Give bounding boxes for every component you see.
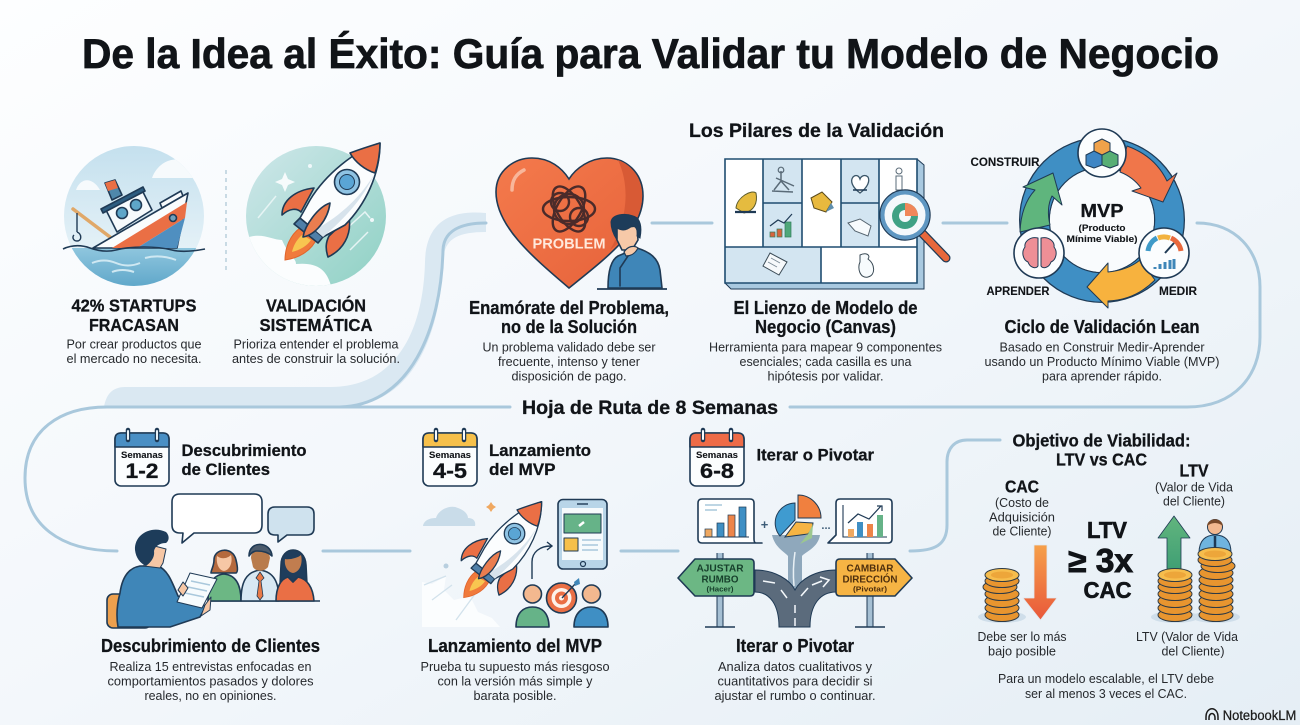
chart: lean validation cycle: MVP <box>1080 201 1124 221</box>
canvas icon: revenue bag <box>859 254 874 277</box>
heading: lanzamiento <box>489 441 591 479</box>
canvas icon: value cube <box>811 192 832 212</box>
chart bubble: qualitative <box>698 499 762 543</box>
listener: woman dark hair <box>276 550 314 601</box>
text block: validacion sistematica: antes de construir la solución. <box>232 351 400 366</box>
text block: lienzo: Herramienta para mapear 9 componentes <box>709 340 942 354</box>
heading: lanzamiento: Lanzamiento <box>489 441 591 460</box>
caption: ltv: del Cliente) <box>1162 644 1224 658</box>
illustration: iterate or pivot: ... <box>821 520 831 532</box>
ltv label: LTV <box>1180 460 1209 480</box>
illustration: iterate or pivot <box>678 495 912 627</box>
heading: descubrimiento: Descubrimiento <box>182 441 306 460</box>
calendar: weeks 4-5 <box>423 430 477 486</box>
sign: cambiar direccion <box>836 559 912 596</box>
listener: woman <box>208 550 241 601</box>
chart: lean validation cycle <box>970 129 1197 308</box>
sign: cambiar direccion: (Pivotar) <box>853 584 888 594</box>
text block: lanzamiento: Lanzamiento del MVP <box>428 636 602 656</box>
formula: CAC <box>1084 577 1132 603</box>
ltv label <box>1155 460 1234 508</box>
formula <box>1068 517 1134 603</box>
text block: 42% startups: el mercado no necesita. <box>66 351 202 366</box>
cac label <box>989 476 1055 538</box>
text block: iterar <box>714 636 876 703</box>
text block: 42% startups: FRACASAN <box>89 315 179 335</box>
calendar: weeks 4-5: Semanas <box>429 450 471 461</box>
node: learn <box>1014 228 1064 278</box>
text block: ciclo: Basado en Construir Medir-Aprender <box>1000 340 1205 354</box>
listener: man <box>241 544 279 601</box>
caption: cac: Debe ser lo más <box>978 629 1067 644</box>
text block: enamorate: Un problema validado debe ser <box>482 340 656 354</box>
person on tall coin stack <box>1192 519 1240 623</box>
heading: descubrimiento: de Clientes <box>182 460 270 479</box>
text block: descubrimiento: reales, no en opiniones. <box>144 688 276 703</box>
text block: lanzamiento: con la versión más simple y <box>438 674 593 688</box>
chart: lean validation cycle: CONSTRUIR <box>970 155 1040 169</box>
text block: iterar: Analiza datos cualitativos y <box>718 659 872 674</box>
text block: enamorate: no de la Solución <box>501 317 637 337</box>
caption: ltv: LTV (Valor de Vida <box>1136 629 1239 644</box>
arrow: learn to build <box>1020 173 1062 232</box>
calendar: weeks 6-8: Semanas <box>696 450 738 461</box>
speech bubbles <box>172 494 314 543</box>
calendar: weeks 1-2: 1-2 <box>126 460 158 483</box>
ltv label: (Valor de Vida <box>1155 480 1234 494</box>
arrow to tablet <box>532 542 552 579</box>
conclusion: Para un modelo escalable, el LTV debe <box>998 671 1214 686</box>
connector: flowing path between sections <box>25 212 1260 551</box>
calendar: weeks 1-2 <box>115 430 169 486</box>
calendar: weeks 6-8: 6-8 <box>700 460 734 483</box>
pie chart <box>775 495 821 544</box>
canvas icon: cost doc <box>763 253 787 275</box>
canvas icon: person <box>896 168 902 174</box>
title: De la Idea al Éxito: Guía para Validar tu Modelo de Negocio <box>82 30 1219 77</box>
text block: validacion sistematica: VALIDACIÓN <box>266 294 366 316</box>
text block: lanzamiento <box>420 636 610 703</box>
heading: los pilares: Los Pilares de la Validación <box>689 120 944 142</box>
text block: ciclo <box>984 317 1220 384</box>
text block: 42% startups: 42% STARTUPS <box>72 296 196 316</box>
brand: notebooklm: NotebookLM <box>1223 708 1296 723</box>
node: measure <box>1139 228 1189 278</box>
text block: 42% startups: Por crear productos que <box>66 336 202 352</box>
ltv label: del Cliente) <box>1163 494 1225 508</box>
chart: lean validation cycle: Mínime Viable) <box>1066 234 1138 245</box>
text block: lienzo: El Lienzo de Modelo de <box>734 298 918 318</box>
calendar: weeks 6-8 <box>690 430 744 486</box>
sign: ajustar rumbo: RUMBO <box>702 574 739 586</box>
text block: ciclo: usando un Producto Mínimo Viable (MVP) <box>984 354 1220 369</box>
canvas icon: activities <box>772 171 794 192</box>
icon: sinking ship <box>63 146 205 288</box>
sign posts <box>720 553 870 627</box>
text block: lienzo: Negocio (Canvas) <box>755 317 896 337</box>
illustration: customer interview <box>107 494 320 628</box>
rocket <box>282 143 380 260</box>
text block: 42% startups <box>66 296 202 366</box>
caption: cac: bajo posible <box>988 644 1056 658</box>
arrow: down <box>1023 545 1057 620</box>
heading <box>1012 430 1190 470</box>
magnifier <box>880 190 946 258</box>
text block: descubrimiento: Realiza 15 entrevistas enfocadas en <box>110 659 312 674</box>
text block: iterar: cuantitativos para decidir si <box>718 674 873 688</box>
divider <box>225 170 227 270</box>
chart: lean validation cycle: APRENDER <box>986 284 1050 298</box>
arrow: build to measure <box>1120 146 1177 202</box>
sign: ajustar rumbo: AJUSTAR <box>696 564 744 574</box>
canvas icon: channels <box>848 219 871 236</box>
tablet <box>558 500 607 569</box>
arrow: measure to learn <box>1087 260 1155 308</box>
chart bubble: quantitative <box>828 499 892 543</box>
cac label: CAC <box>1005 476 1039 496</box>
heading: hoja de ruta: Hoja de Ruta de 8 Semanas <box>522 398 778 419</box>
text block: enamorate: frecuente, intenso y tener <box>498 354 641 369</box>
sign: ajustar rumbo: (Hacer) <box>706 584 734 594</box>
chart: lean validation cycle: (Producto <box>1078 223 1126 234</box>
icon: business model canvas <box>725 159 946 289</box>
formula: ≥ 3x <box>1068 542 1134 579</box>
text block: lienzo: hipótesis por validar. <box>768 368 884 384</box>
cac label: Adquisición <box>989 510 1055 524</box>
interviewer <box>107 530 217 628</box>
text block: validacion sistematica <box>232 294 400 366</box>
people and target <box>516 578 608 627</box>
chart: lean validation cycle: MEDIR <box>1159 284 1197 298</box>
heading: iterar o pivotar: Iterar o Pivotar <box>756 446 874 464</box>
text block: enamorate: Enamórate del Problema, <box>469 298 669 318</box>
canvas icon: partners <box>736 192 756 213</box>
sign: ajustar rumbo <box>678 559 754 596</box>
text block: ciclo: Ciclo de Validación Lean <box>1004 317 1200 337</box>
heading: Objetivo de Viabilidad: <box>1012 430 1190 450</box>
text block: enamorate <box>469 298 669 384</box>
illustration: mvp launch <box>422 500 608 627</box>
sign: cambiar direccion: CAMBIAR <box>846 564 894 574</box>
caption: cac <box>978 629 1067 658</box>
conclusion: ser al menos 3 veces el CAC. <box>1025 686 1187 701</box>
canvas icon: chart <box>770 232 775 237</box>
panel: viability objective <box>978 430 1240 701</box>
caption: ltv <box>1136 629 1239 658</box>
conclusion <box>998 671 1214 701</box>
arrow: up <box>1158 516 1190 570</box>
text block: validacion sistematica: SISTEMÁTICA <box>260 314 373 335</box>
coins: low stack <box>978 568 1026 623</box>
calendar: weeks 1-2: Semanas <box>121 450 163 461</box>
text block: iterar: ajustar el rumbo o continuar. <box>714 688 876 703</box>
text block: lienzo <box>709 298 942 384</box>
text block: descubrimiento <box>101 636 320 703</box>
icon: heart with thinking person: PROBLEM <box>532 236 606 252</box>
text block: descubrimiento: comportamientos pasados y dolores <box>108 674 314 688</box>
node: build <box>1078 129 1126 177</box>
formula: LTV <box>1087 517 1128 543</box>
sign: cambiar direccion: DIRECCIÓN <box>842 572 898 586</box>
text block: descubrimiento: Descubrimiento de Clientes <box>101 636 320 656</box>
icon: rocket in circle <box>246 143 386 290</box>
rocket <box>461 502 542 598</box>
text block: ciclo: para aprender rápido. <box>1042 368 1162 384</box>
road <box>755 570 836 627</box>
text block: validacion sistematica: Prioriza entender el problema <box>234 336 399 352</box>
heading: descubrimiento <box>182 441 306 479</box>
text block: enamorate: disposición de pago. <box>512 368 626 384</box>
text block: lanzamiento: barata posible. <box>474 688 556 703</box>
heading: LTV vs CAC <box>1056 450 1147 470</box>
canvas icon: heart <box>852 176 869 193</box>
illustration: iterate or pivot: + <box>761 517 769 532</box>
icon: heart with thinking person <box>496 158 667 289</box>
funnel <box>772 535 820 596</box>
text block: lienzo: esenciales; cada casilla es una <box>740 354 912 369</box>
smoke <box>422 576 500 627</box>
text block: lanzamiento: Prueba tu supuesto más riesgoso <box>420 659 610 674</box>
cac label: de Cliente) <box>992 524 1052 538</box>
coins: medium stack <box>1151 568 1199 623</box>
heading: lanzamiento: del MVP <box>489 460 556 479</box>
text block: iterar: Iterar o Pivotar <box>736 636 854 656</box>
cac label: (Costo de <box>995 495 1049 510</box>
calendar: weeks 4-5: 4-5 <box>433 460 467 483</box>
cloud <box>423 507 475 526</box>
